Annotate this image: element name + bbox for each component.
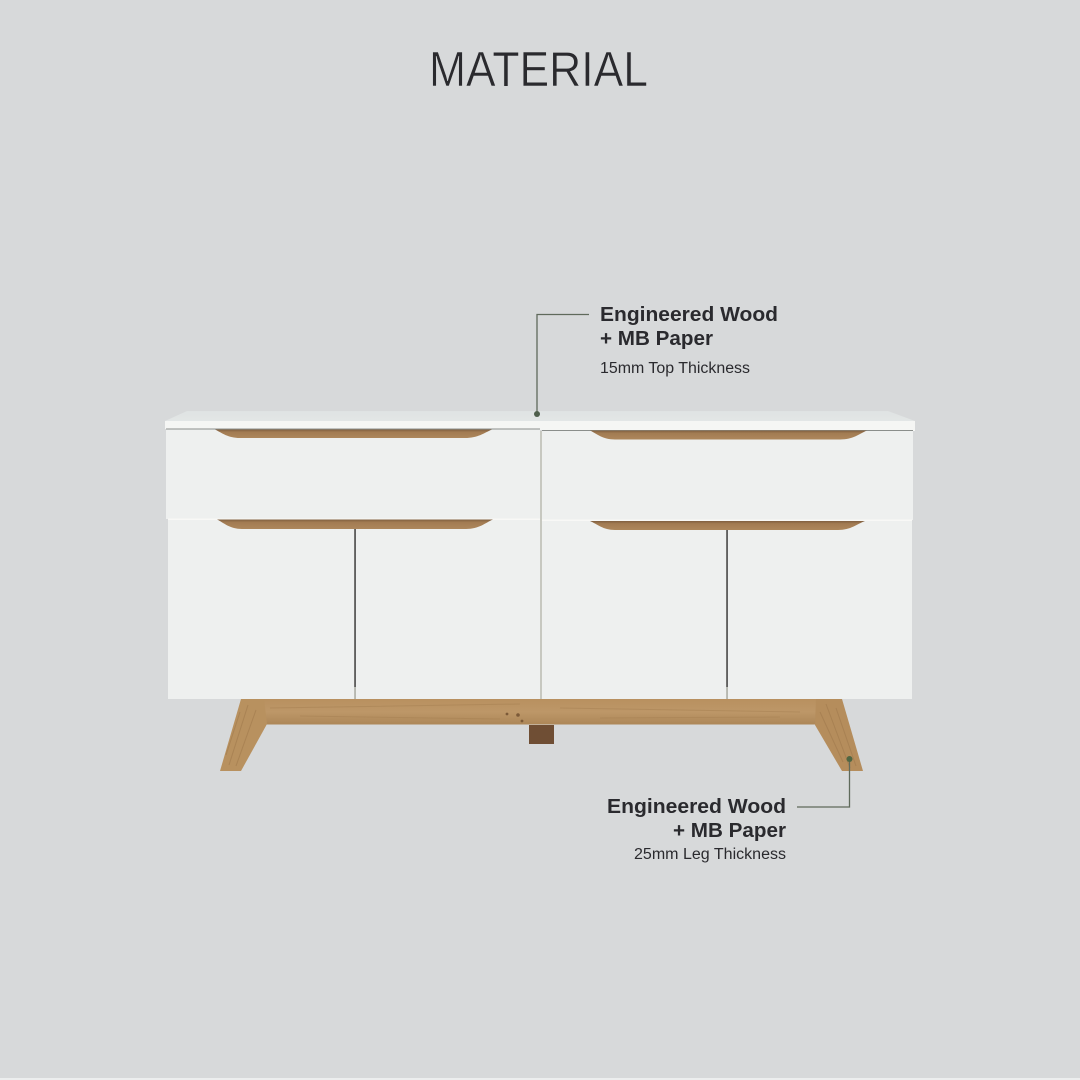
callout heading: leg: Engineered Wood: [607, 796, 786, 818]
leader line: leg: [797, 759, 850, 807]
sideboard illustration: [165, 411, 915, 771]
callout: leg material: [607, 756, 852, 863]
centre divider: [540, 431, 542, 699]
lower left doors: [168, 518, 540, 699]
lower right doors: [542, 520, 912, 699]
centre foot: [529, 725, 554, 744]
callout heading: top: + MB Paper: [600, 328, 713, 350]
upper right drawer: [542, 430, 913, 520]
dot: leg: [846, 756, 852, 762]
callout note: leg: 25mm Leg Thickness: [634, 846, 786, 863]
callout heading: top: Engineered Wood: [600, 304, 778, 326]
sideboard top panel: [165, 411, 915, 431]
right leg: [815, 699, 863, 771]
callout: top material: [534, 304, 778, 417]
wooden base rail: [260, 699, 825, 724]
title: MATERIAL: [429, 43, 648, 97]
leader line: top: [537, 314, 589, 414]
left leg: [220, 699, 267, 771]
upper left drawer: [166, 428, 540, 519]
dot: top: [534, 411, 540, 417]
callout heading: leg: + MB Paper: [673, 820, 786, 842]
callout note: top: 15mm Top Thickness: [600, 360, 750, 377]
